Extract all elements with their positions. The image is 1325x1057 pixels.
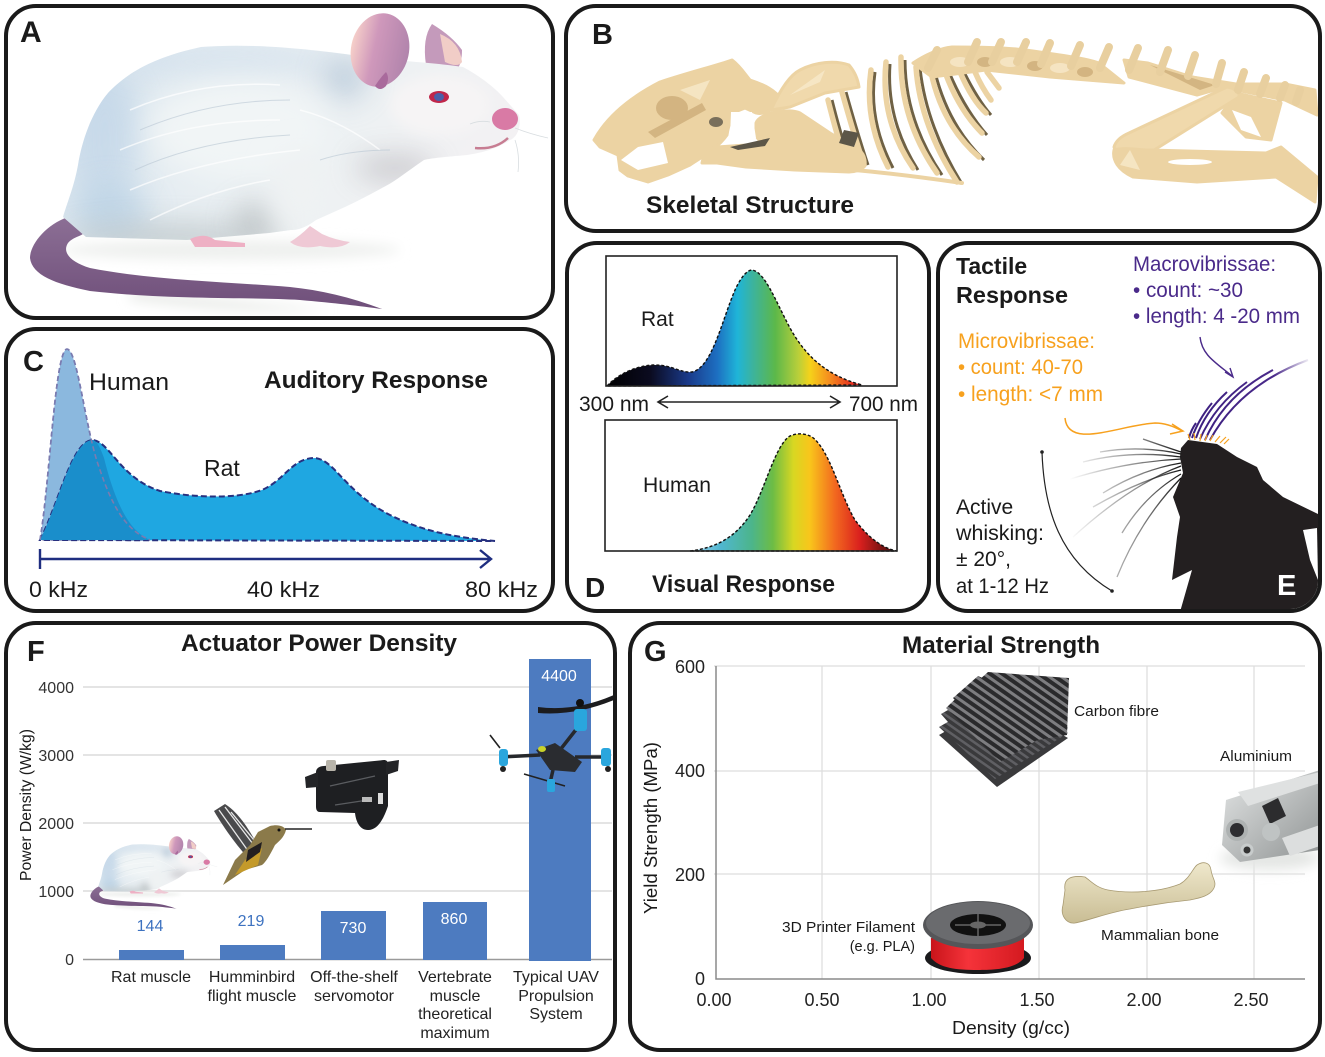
panel B frame <box>566 6 1320 231</box>
y axis title: Yield Strength (MPa) <box>641 742 661 914</box>
whiskers: active <box>1058 439 1181 577</box>
x axis labels: 0.00 <box>696 990 732 1010</box>
text: microvibrissae: • length: <7 mm <box>958 383 1103 406</box>
arrow: macrovibrissae <box>1200 337 1233 377</box>
category labels: Propulsion <box>518 988 594 1005</box>
y axis labels: 3000 <box>38 748 74 765</box>
label D: D <box>585 572 605 603</box>
text: human: Human <box>643 474 711 497</box>
heading: actuator power density: Actuator Power Density <box>181 630 458 657</box>
category labels: muscle <box>430 988 480 1005</box>
category labels: servomotor <box>314 988 395 1005</box>
wavelength scale: 700 nm <box>849 393 918 416</box>
text: 3D printer filament <box>782 920 915 955</box>
x axis labels: 1.50 <box>1019 990 1055 1010</box>
panel A frame <box>6 6 553 318</box>
text: microvibrissae <box>958 330 1103 406</box>
category labels: Off-the-shelf <box>310 969 398 986</box>
text: active whisking: at 1-12 Hz <box>956 575 1049 598</box>
y axis labels: 400 <box>675 761 705 781</box>
panel F frame <box>6 623 615 1050</box>
category labels: theoretical <box>418 1006 492 1023</box>
text: rat: Rat <box>204 455 240 481</box>
label E: E <box>1277 570 1296 602</box>
chart: human spectrum <box>605 420 897 551</box>
text: active whisking: whisking: <box>955 522 1044 545</box>
icon: small rat <box>90 835 217 909</box>
y axis labels: 0 <box>65 952 74 969</box>
heading: visual response: Visual Response <box>652 571 835 598</box>
arc: whisking range <box>1040 450 1114 593</box>
text: macrovibrissae: • count: ~30 <box>1133 279 1243 302</box>
panel B: skeleton <box>566 6 1320 231</box>
y axis labels: 1000 <box>38 884 74 901</box>
y axis title: Power Density (W/kg) <box>18 729 35 881</box>
label F: F <box>27 636 45 668</box>
text: carbon fibre: Carbon fibre <box>1074 703 1159 720</box>
panel G: material strength <box>630 623 1320 1050</box>
axis labels: 0 kHz <box>29 577 88 602</box>
wavelength scale <box>579 393 918 416</box>
icon: servomotor <box>305 760 399 830</box>
chart: grid <box>714 666 1305 979</box>
text: 3D printer filament: 3D Printer Filament <box>782 920 915 936</box>
text: aluminium: Aluminium <box>1220 748 1292 765</box>
panel D: visual response <box>567 243 929 611</box>
category labels: flight muscle <box>208 988 297 1005</box>
text: active whisking: Active <box>956 496 1013 519</box>
chart: rat spectrum <box>606 256 897 386</box>
chart: bars: 144 <box>137 918 163 935</box>
axis arrow: frequency <box>40 549 491 569</box>
icon: aluminium stock <box>1220 770 1320 870</box>
chart: bars <box>83 659 612 961</box>
illustration: rat head silhouette <box>1172 440 1320 612</box>
category labels: System <box>529 1006 583 1023</box>
axis labels <box>29 577 538 602</box>
text: active whisking: ± 20°, <box>956 548 1011 571</box>
text: macrovibrissae <box>1133 253 1300 328</box>
label G: G <box>644 636 667 668</box>
chart: hearing range curves <box>40 349 495 541</box>
x axis labels: 2.50 <box>1233 990 1269 1010</box>
panel F: actuator power density <box>6 623 615 1050</box>
y axis labels: 2000 <box>38 816 74 833</box>
chart: bars: 730 <box>340 920 366 937</box>
heading: tactile response: Response <box>956 282 1068 308</box>
label C: C <box>23 346 44 378</box>
illustration: white rat <box>30 8 548 311</box>
y axis labels: 4000 <box>38 680 74 697</box>
text: active whisking <box>955 496 1049 598</box>
icon: carbon fibre sheets <box>939 672 1069 787</box>
x axis labels: 1.00 <box>911 990 947 1010</box>
icon: hummingbird <box>214 804 312 885</box>
category labels <box>111 969 599 1042</box>
heading: auditory response: Auditory Response <box>264 367 488 394</box>
category labels: Humminbird <box>209 969 295 986</box>
chart: bars: 860 <box>441 911 467 928</box>
heading: skeletal structure: Skeletal Structure <box>646 192 854 219</box>
panel C frame <box>6 329 553 611</box>
icon: filament spool <box>923 901 1033 974</box>
text: human: Human <box>89 369 169 396</box>
category labels: Rat muscle <box>111 969 191 986</box>
text: microvibrissae: • count: 40-70 <box>958 356 1083 379</box>
panel E frame <box>938 243 1320 611</box>
y axis labels: 200 <box>675 865 705 885</box>
label A: A <box>20 16 42 49</box>
label B: B <box>592 19 613 51</box>
whiskers: macrovibrissae <box>1189 360 1308 440</box>
text: mammalian bone: Mammalian bone <box>1101 927 1219 944</box>
whiskers: microvibrissae <box>1188 433 1229 444</box>
panel E: tactile response <box>938 243 1320 612</box>
axis labels: 40 kHz <box>247 577 320 602</box>
x axis title: Density (g/cc) <box>952 1017 1070 1038</box>
chart: bars: 4400 <box>541 668 577 685</box>
text: macrovibrissae: Macrovibrissae: <box>1133 253 1276 276</box>
y axis labels: 600 <box>675 657 705 677</box>
x axis labels: 2.00 <box>1126 990 1162 1010</box>
axis labels: 80 kHz <box>465 577 538 602</box>
category labels: Vertebrate <box>418 969 492 986</box>
heading: tactile response: Tactile <box>956 253 1027 279</box>
icon: drone <box>490 695 614 792</box>
x axis labels <box>696 990 1269 1010</box>
chart: bars: 219 <box>238 913 264 930</box>
text: 3D printer filament: (e.g. PLA) <box>850 939 915 955</box>
wavelength scale: 300 nm <box>579 393 649 416</box>
panel A: rat illustration <box>6 6 553 318</box>
heading: tactile response <box>956 253 1068 308</box>
heading: material strength: Material Strength <box>902 632 1100 659</box>
panel G frame <box>630 623 1320 1050</box>
category labels: Typical UAV <box>513 969 599 986</box>
text: macrovibrissae: • length: 4 -20 mm <box>1133 305 1300 328</box>
panel D frame <box>567 243 929 611</box>
arrow: microvibrissae <box>1065 418 1183 434</box>
illustration: skeleton <box>594 42 1317 202</box>
text: rat: Rat <box>641 308 674 331</box>
y axis labels <box>38 680 74 969</box>
x axis labels: 0.50 <box>804 990 840 1010</box>
y axis labels: 0 <box>695 969 705 989</box>
y axis labels <box>675 657 705 989</box>
category labels: maximum <box>420 1025 490 1042</box>
text: microvibrissae: Microvibrissae: <box>958 330 1095 353</box>
panel C: auditory response <box>6 329 553 611</box>
icon: mammalian bone <box>1062 863 1215 923</box>
